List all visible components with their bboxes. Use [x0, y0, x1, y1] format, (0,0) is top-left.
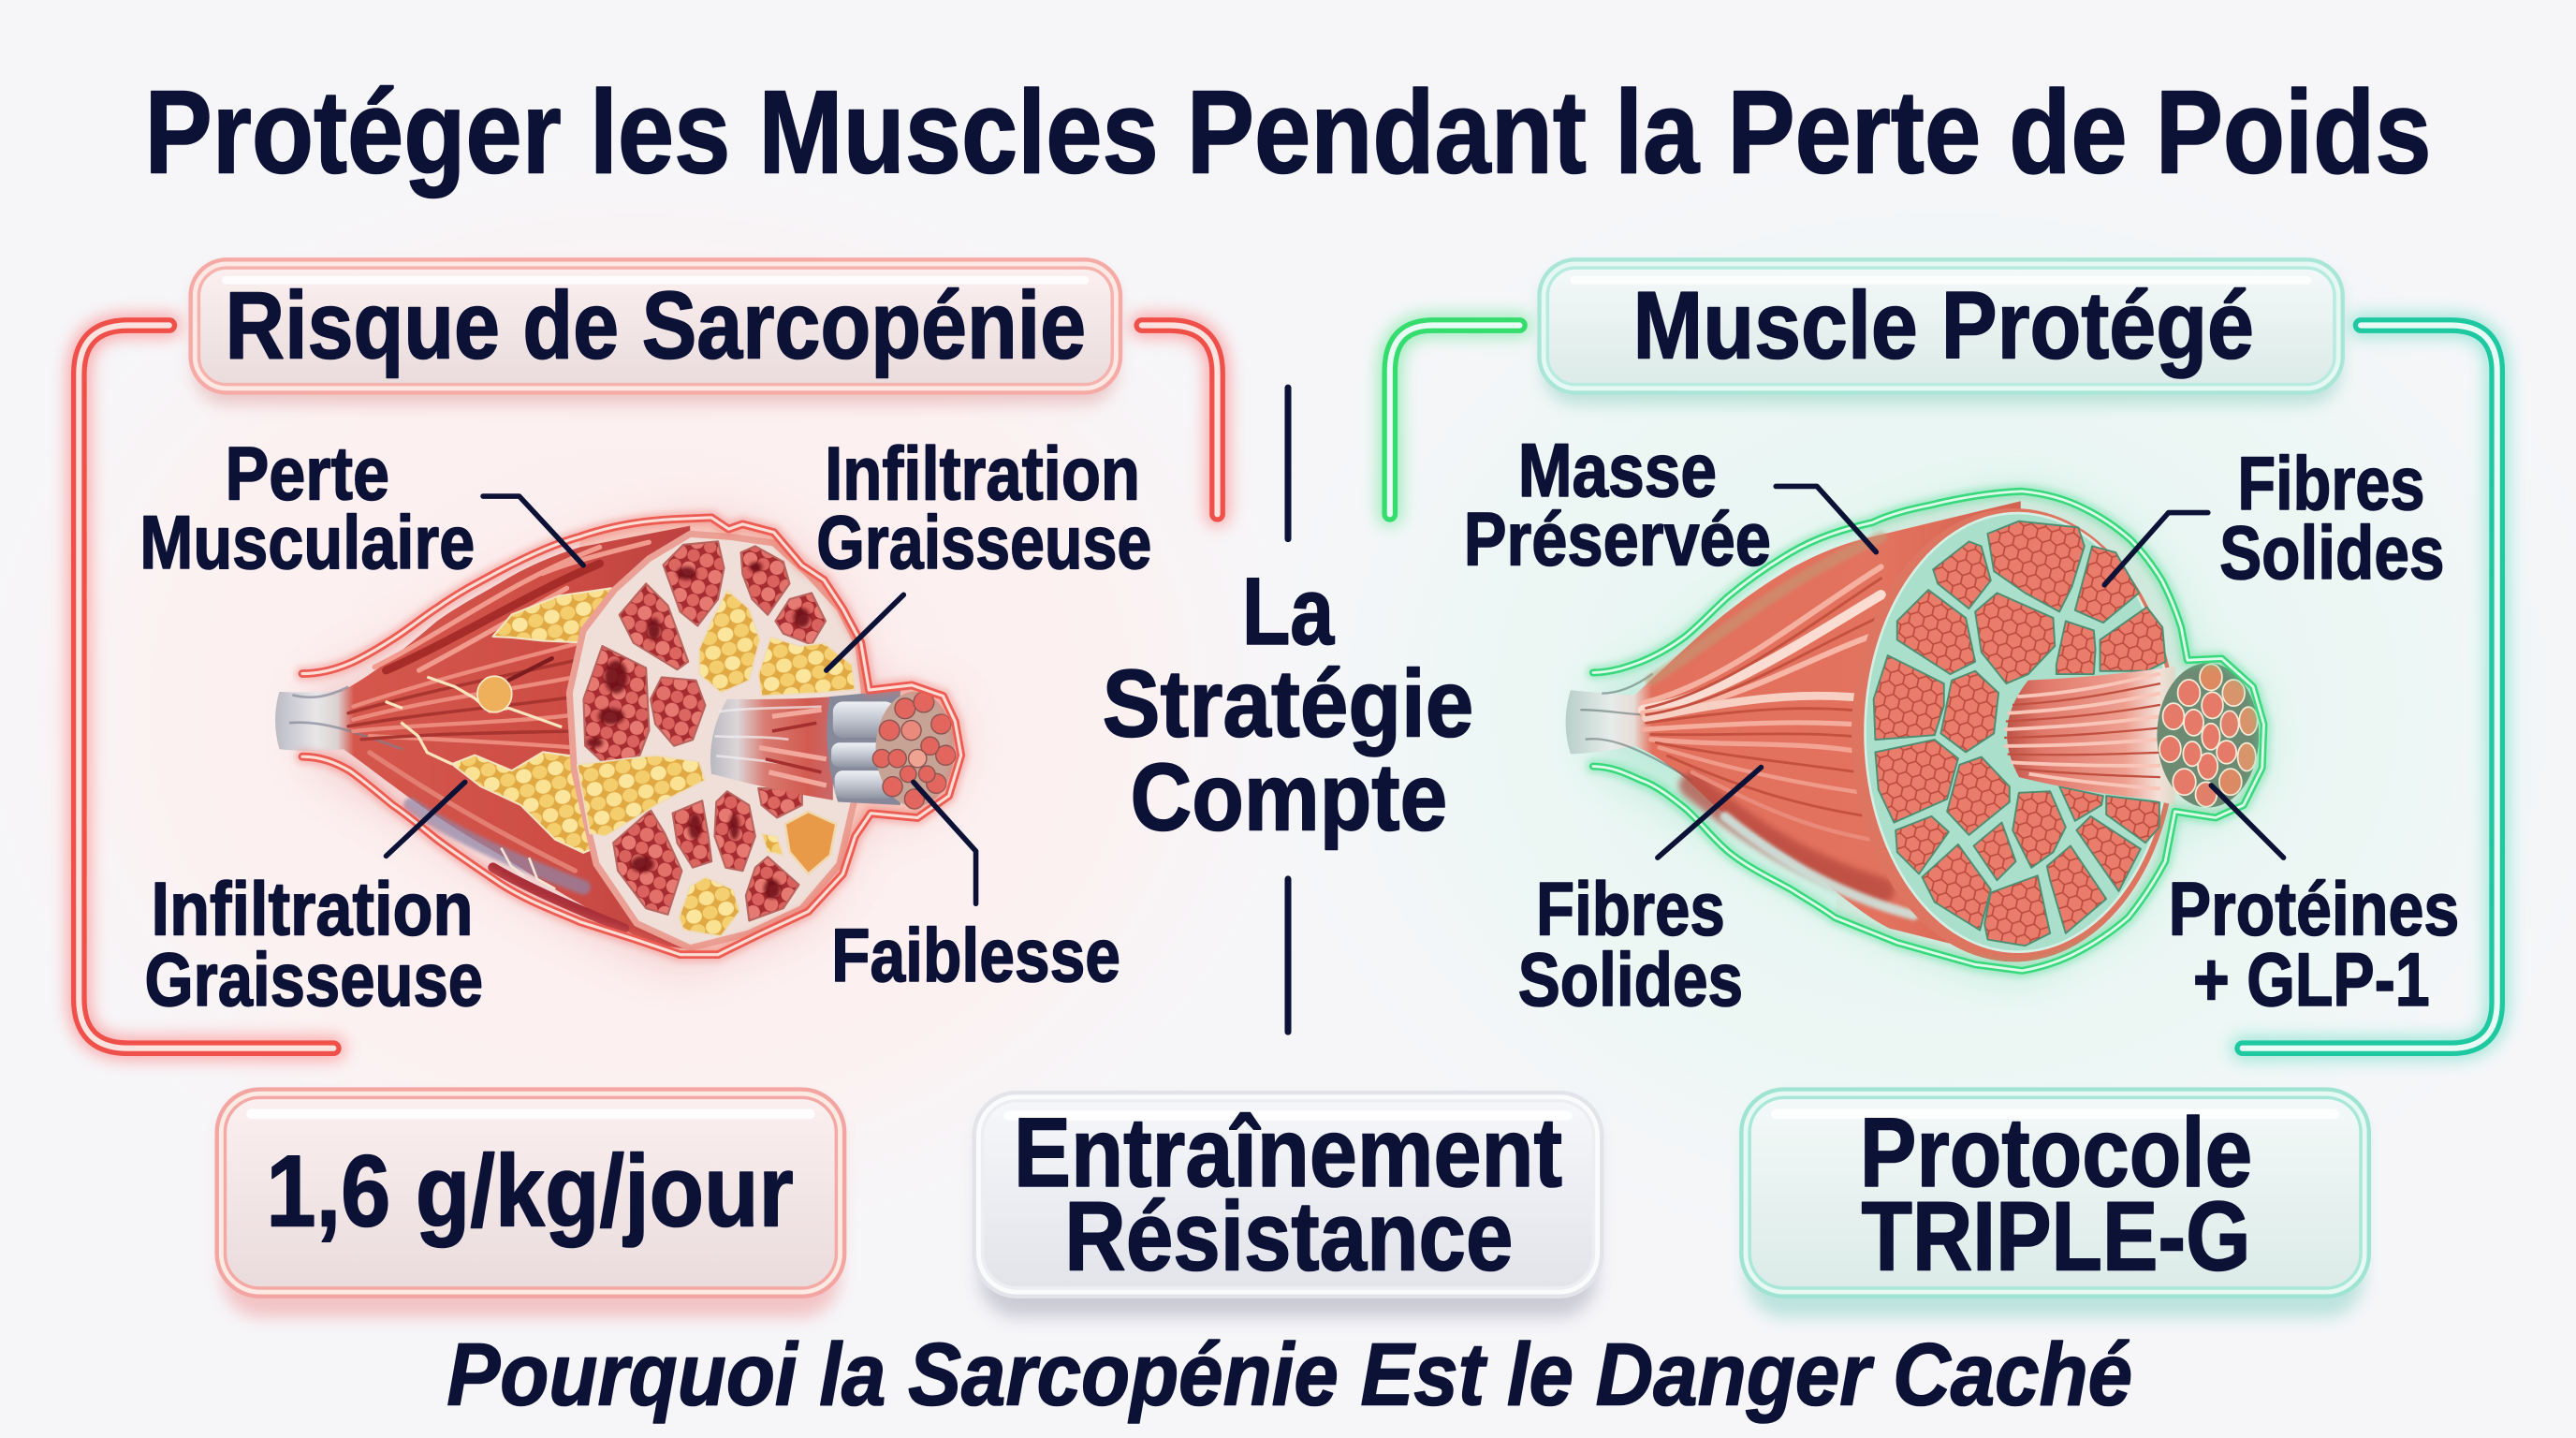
- heading box: muscle protégé: Muscle Protégé: [1633, 272, 2254, 379]
- muscle outline: [1593, 492, 2263, 971]
- center text: Compte: [1131, 743, 1447, 850]
- label: infiltration graisseuse haut: Graisseuse: [816, 501, 1151, 585]
- label: fibres solides bas: [1518, 868, 1743, 1022]
- panel: risque de sarcopénie: [79, 259, 1218, 1049]
- muscle outline: [302, 518, 961, 955]
- end cap with fascicles: [872, 692, 956, 809]
- green halo and shadow: [1597, 493, 2263, 977]
- box: protocole triple-g: TRIPLE-G: [1862, 1182, 2250, 1292]
- label: perte musculaire: [139, 433, 475, 585]
- callout lines left muscle: [386, 496, 976, 903]
- silver bars: [831, 701, 896, 799]
- fat compartments: [578, 590, 856, 936]
- box: entraînement résistance: Résistance: [1064, 1182, 1513, 1292]
- muscle fibres: [348, 542, 649, 929]
- tendon streak: [289, 687, 402, 749]
- label: infiltration graisseuse bas: Infiltration: [152, 868, 474, 952]
- label: perte musculaire: Perte: [225, 433, 389, 517]
- label: fibres solides bas: Solides: [1518, 938, 1743, 1022]
- end cap with fascicles: [2157, 663, 2259, 808]
- fibre compartments: [1874, 521, 2166, 946]
- box: entraînement résistance: Entraînement: [1014, 1098, 1562, 1208]
- label: infiltration graisseuse haut: [816, 433, 1151, 585]
- silver sheath: [827, 690, 900, 805]
- label: protéines + glp-1: Protéines: [2169, 868, 2459, 952]
- inner bundle: [2004, 667, 2175, 805]
- heading box: risque de sarcopénie: Risque de Sarcopénie: [225, 272, 1086, 379]
- illustration: healthy muscle: [1566, 492, 2263, 977]
- pale tissue under the outline: [580, 518, 961, 955]
- divider bottom: [1284, 875, 1292, 1035]
- muscle body: [275, 526, 690, 949]
- label: infiltration graisseuse bas: Graisseuse: [145, 938, 483, 1022]
- box: 1,6 g/kg/jour: [217, 1090, 844, 1318]
- tendon streak: [1580, 674, 1692, 781]
- label: infiltration graisseuse bas: [145, 868, 483, 1022]
- illustration: damaged muscle: [275, 518, 961, 969]
- center message: la stratégie compte: [1103, 385, 1473, 1035]
- subtitle: Pourquoi la Sarcopénie Est le Danger Caché: [446, 1326, 2132, 1425]
- label: fibres solides bas: Fibres: [1536, 868, 1725, 952]
- halo and shadow: [313, 520, 961, 969]
- label: infiltration graisseuse haut: Infiltration: [825, 433, 1140, 517]
- box: 1,6 g/kg/jour: 1,6 g/kg/jour: [266, 1134, 794, 1248]
- dark crack: [508, 658, 552, 681]
- label: protéines + glp-1: [2169, 868, 2459, 1022]
- center text: Stratégie: [1103, 650, 1473, 756]
- heading box: muscle protégé: [1540, 259, 2343, 404]
- heading box: risque de sarcopénie: [191, 259, 1120, 404]
- panel: muscle protégé: [1390, 259, 2497, 1049]
- divider top: [1284, 385, 1292, 542]
- label: masse préservée: Masse: [1518, 429, 1717, 513]
- callout lines right muscle: [1658, 486, 2284, 858]
- extra tears near lower edge: [501, 848, 555, 888]
- disc green matrix: [1866, 513, 2171, 952]
- label: faiblesse: Faiblesse: [831, 914, 1120, 998]
- orange fat compartment: [785, 812, 836, 873]
- box: protocole triple-g: [1741, 1090, 2369, 1318]
- torn tissue cracks: [386, 677, 562, 764]
- dark necrotic patches: [587, 562, 810, 899]
- label: protéines + glp-1: + GLP-1: [2193, 938, 2430, 1022]
- label: masse préservée: Préservée: [1464, 498, 1771, 582]
- green and teal bracket frame: [1390, 325, 2497, 1049]
- disc red rim: [1852, 508, 2176, 961]
- upper fat deposit: [493, 588, 616, 644]
- inner bundle: [710, 690, 900, 805]
- cross-section disc: [1852, 508, 2176, 961]
- muscle body: [1566, 501, 2021, 961]
- muscle compartments: [583, 541, 826, 921]
- box: protocole triple-g: Protocole: [1860, 1098, 2252, 1208]
- center text: La: [1242, 558, 1335, 665]
- label: masse préservée: [1464, 429, 1771, 582]
- label: fibres solides haut: Fibres: [2237, 442, 2424, 526]
- muscle fibres: [1643, 537, 1914, 916]
- pale tissue under the outline: [1835, 492, 2263, 971]
- box: entraînement résistance: [974, 1093, 1602, 1318]
- label: perte musculaire: Musculaire: [139, 501, 475, 585]
- small fat nodule: [477, 676, 512, 712]
- red bracket frame: [79, 325, 1218, 1049]
- lower fat deposit: [452, 752, 611, 853]
- cross-section disc: [569, 534, 864, 948]
- center text: [1103, 558, 1473, 850]
- label: fibres solides haut: Solides: [2219, 511, 2445, 595]
- label: fibres solides haut: [2219, 442, 2445, 595]
